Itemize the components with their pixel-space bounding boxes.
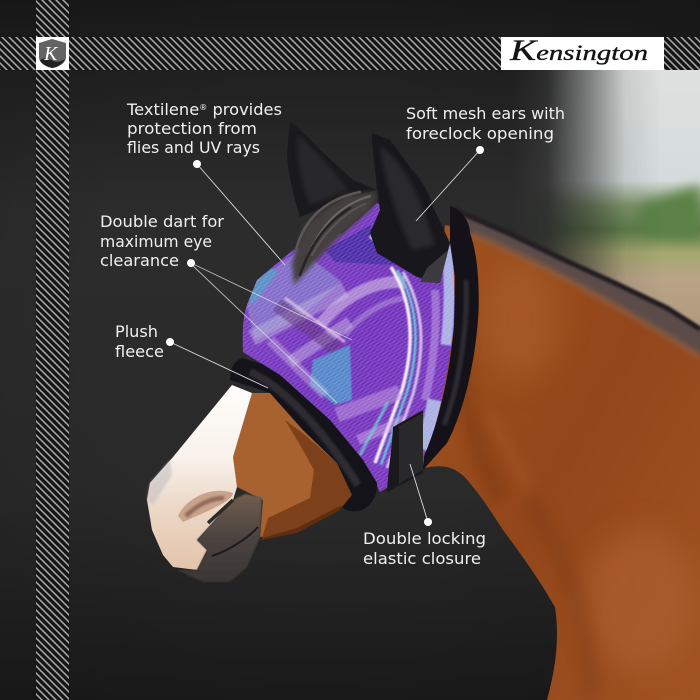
- brown cheek: [233, 393, 352, 537]
- mane: [453, 208, 700, 356]
- callout: Textilene: flies and UV rays: [127, 138, 260, 157]
- callout: double dart: maximum eye: [100, 232, 212, 251]
- callout: Textilene: [126, 100, 285, 265]
- pink and dark checks: [277, 305, 338, 350]
- callout: Textilene: provides: [207, 100, 282, 119]
- callout: plush fleece: Plush: [115, 322, 158, 341]
- white and teal arc stripes: [375, 267, 410, 463]
- upper-left teal weave: [243, 250, 342, 340]
- callout: elastic closure: elastic closure: [363, 549, 481, 568]
- badge logo: [36, 37, 69, 70]
- back fleece trim: [423, 206, 479, 470]
- horse neck: [425, 208, 700, 700]
- left ear: [287, 122, 377, 217]
- right ear: [370, 133, 450, 283]
- callout: elastic closure: [363, 464, 486, 568]
- brand logo: Kensington: [501, 34, 664, 70]
- pale diagonal band: [252, 290, 345, 338]
- blurred paddock backdrop: [531, 70, 700, 327]
- badge logo: K: [43, 43, 59, 65]
- callout: elastic closure: Double locking: [363, 529, 486, 548]
- callout: Textilene: ®: [199, 103, 207, 112]
- white blaze and nose: [147, 385, 252, 570]
- horizontal hatch band: [0, 37, 700, 70]
- vertical hatch band: [36, 0, 69, 700]
- nostril: [178, 491, 233, 522]
- lower pink stripes: [337, 392, 400, 415]
- callout: mesh ears: Soft mesh ears with: [406, 104, 565, 123]
- elastic closure strap: [387, 410, 423, 492]
- dark muzzle: [177, 494, 262, 582]
- horse: [147, 122, 700, 700]
- callout: Textilene: protection from: [127, 119, 257, 138]
- mask body plaid: [242, 203, 454, 492]
- callout: double dart: Double dart for: [100, 212, 224, 231]
- horse muzzle: [147, 385, 352, 582]
- pale arc: [320, 282, 405, 325]
- callout: mesh ears: [406, 104, 565, 221]
- nose fleece trim: [230, 358, 377, 511]
- forelock: [292, 192, 377, 285]
- right edge strip: [446, 245, 449, 345]
- callout: Textilene: Textilene: [127, 100, 198, 119]
- callout: plush fleece: [115, 322, 268, 388]
- lower teal patch: [310, 345, 352, 405]
- callout: plush fleece: fleece: [115, 342, 164, 361]
- callout: double dart: clearance: [100, 251, 179, 270]
- callout: double dart: [100, 212, 352, 403]
- callout: mesh ears: foreclock opening: [406, 124, 554, 143]
- brand logo: Kensington: K ensington: [509, 34, 648, 67]
